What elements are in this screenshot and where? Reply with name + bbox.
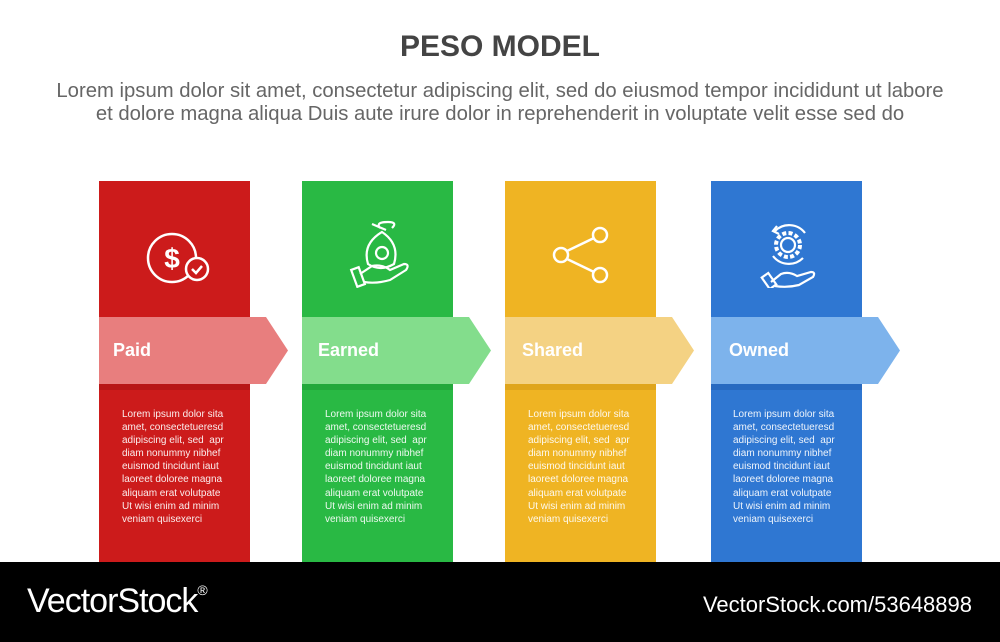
label: owned: Owned [729,340,789,360]
text: owned: veniam quisexerci [733,514,813,525]
text: paid: amet, consectetueresd [122,422,223,433]
text: earned: Lorem ipsum dolor sita [325,409,426,420]
text: earned [325,409,427,525]
panel: paid [99,181,250,562]
icon: dollar check: $ [164,243,180,274]
panel: shared [505,181,656,562]
subtitle: Lorem ipsum dolor sit amet, consectetur adipiscing elit, sed do eiusmod tempor incididunt ut labore [56,80,944,102]
text: owned: amet, consectetueresd [733,422,834,433]
subtitle: et dolore magna aliqua Duis aute irure dolor in reprehenderit in voluptate velit esse sed do [96,102,904,124]
text: owned: Ut wisi enim ad minim [733,501,830,512]
footer bar [0,562,1000,642]
label: paid: Paid [113,340,151,360]
text: shared: aliquam erat volutpate [528,488,626,499]
text: paid: laoreet doloree magna [122,474,222,485]
text: shared: amet, consectetueresd [528,422,629,433]
text: paid: diam nonummy nibhef [122,448,220,459]
text: earned: euismod tincidunt iaut [325,461,422,472]
title: PESO MODEL [400,30,600,63]
arrow: owned [711,317,900,384]
text: earned: adipiscing elit, sed apr [325,435,427,446]
text: owned: adipiscing elit, sed apr [733,435,835,446]
text: earned: Ut wisi enim ad minim [325,501,422,512]
arrow: paid [99,317,288,384]
text: shared: euismod tincidunt iaut [528,461,625,472]
subtitle [56,80,944,124]
text: owned: laoreet doloree magna [733,474,833,485]
text: earned: laoreet doloree magna [325,474,425,485]
text: owned: Lorem ipsum dolor sita [733,409,834,420]
text: earned: diam nonummy nibhef [325,448,423,459]
panel: earned [302,181,453,562]
icon: share [552,226,608,284]
text: paid: Ut wisi enim ad minim [122,501,219,512]
icon: gear hand [760,224,816,288]
text: owned: diam nonummy nibhef [733,448,831,459]
text: earned: amet, consectetueresd [325,422,426,433]
text: earned: veniam quisexerci [325,514,405,525]
text: shared: adipiscing elit, sed apr [528,435,630,446]
text: shared: laoreet doloree magna [528,474,628,485]
text: paid: aliquam erat volutpate [122,488,220,499]
text: paid [122,409,224,525]
text: shared [528,409,630,525]
text: owned: aliquam erat volutpate [733,488,831,499]
footer brand: VectorStock® [27,582,207,620]
footer url: VectorStock.com/53648898 [703,592,972,617]
text: earned: aliquam erat volutpate [325,488,423,499]
text: paid: euismod tincidunt iaut [122,461,219,472]
label: earned: Earned [318,340,379,360]
icon: money bag hand [350,220,409,288]
panel: owned [711,181,862,562]
text: shared: Ut wisi enim ad minim [528,501,625,512]
icon: dollar check [146,232,210,284]
arrow: earned [302,317,491,384]
text: shared: Lorem ipsum dolor sita [528,409,629,420]
text: shared: veniam quisexerci [528,514,608,525]
arrow: shared [505,317,694,384]
text: paid: Lorem ipsum dolor sita [122,409,223,420]
text: owned [733,409,835,525]
text: paid: adipiscing elit, sed apr [122,435,224,446]
text: paid: veniam quisexerci [122,514,202,525]
text: owned: euismod tincidunt iaut [733,461,830,472]
text: shared: diam nonummy nibhef [528,448,626,459]
label: shared: Shared [522,340,583,360]
